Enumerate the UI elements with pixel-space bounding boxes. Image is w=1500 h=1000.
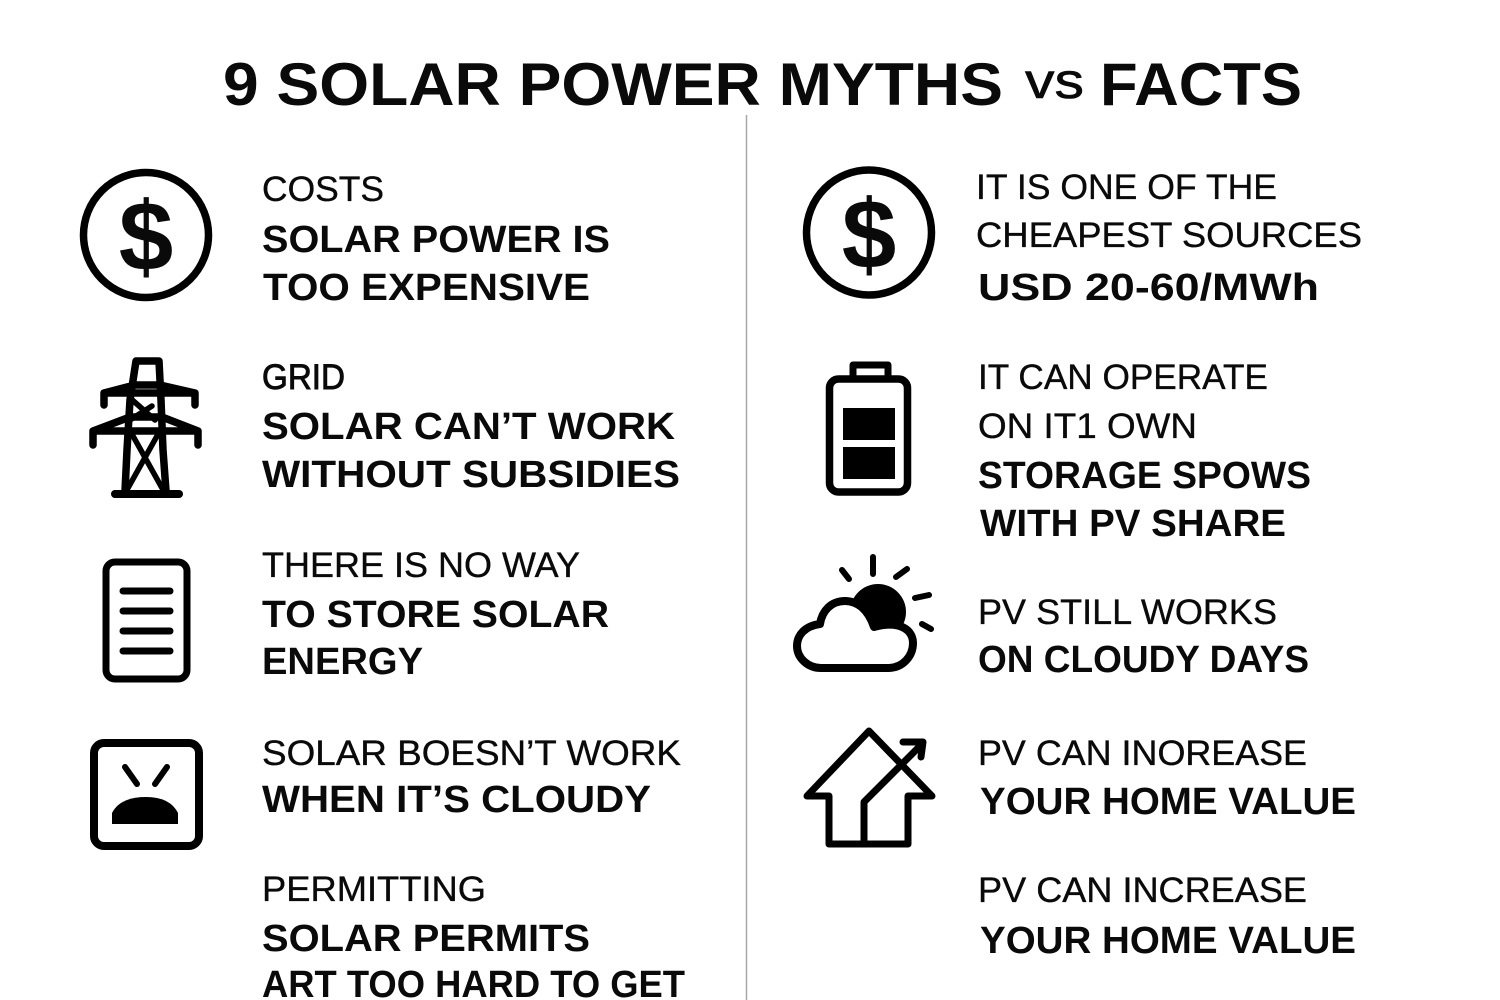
icon: battery [830,365,908,492]
icon: dollar coin: $ [842,179,896,289]
panel: myths column [84,170,685,1000]
fact 2: storage: IT CAN OPERATE [978,358,1268,397]
fact 4: home value [978,734,1356,823]
myth 3: storage: ENERGY [262,641,423,683]
title: vs [1025,53,1084,109]
fact 2: storage: ON IT1 OWN [978,407,1197,446]
fact 5: home value [978,871,1356,962]
myth 2: grid: GRID [262,358,345,397]
fact 5: home value: PV CAN INCREASE [978,871,1307,910]
title: FACTS [1100,51,1302,118]
myth 4: cloudy: SOLAR BOESN’T WORK [262,734,681,773]
myth 5: permitting [262,870,685,1000]
fact 1: cheapest: CHEAPEST SOURCES [976,216,1362,255]
icon: dollar coin [806,170,932,295]
icon: transmission tower [93,361,198,494]
myth 3: storage: THERE IS NO WAY [262,546,580,585]
myth 5: permitting: PERMITTING [262,870,486,909]
icon: dollar coin [84,172,208,298]
myth 3: storage [262,546,609,683]
panel: facts column [797,168,1362,962]
myth 1: costs [262,170,610,309]
fact 3: cloudy days: PV STILL WORKS [978,593,1277,632]
fact 1: cheapest [976,168,1362,309]
fact 5: home value: YOUR HOME VALUE [980,920,1356,962]
myth 4: cloudy: WHEN IT’S CLOUDY [262,779,651,821]
fact 2: storage: WITH PV SHARE [980,503,1286,545]
myth 1: costs: COSTS [262,170,384,209]
fact 3: cloudy days: ON CLOUDY DAYS [978,639,1309,681]
myth 2: grid: WITHOUT SUBSIDIES [262,454,680,496]
title [223,51,1302,118]
icon: dollar coin: $ [119,181,173,291]
fact 2: storage: STORAGE SPOWS [978,455,1311,497]
fact 1: cheapest: USD 20-60/MWh [978,267,1319,309]
myth 3: storage: TO STORE SOLAR [262,594,609,636]
fact 2: storage [978,358,1311,545]
myth 5: permitting: SOLAR PERMITS [262,918,590,960]
myth 2: grid [262,358,680,496]
myth 2: grid: SOLAR CAN’T WORK [262,406,676,448]
fact 4: home value: YOUR HOME VALUE [980,781,1356,823]
fact 3: cloudy days [978,593,1309,681]
myth 1: costs: TOO EXPENSIVE [263,267,590,309]
myth 4: cloudy [262,734,681,821]
icon: sad face box [94,743,199,846]
icon: house with rising arrow [807,731,932,844]
fact 1: cheapest: IT IS ONE OF THE [976,168,1277,207]
icon: sun behind cloud [797,557,931,668]
title: 9 SOLAR POWER MYTHS [223,51,1003,118]
fact 4: home value: PV CAN INOREASE [978,734,1307,773]
myth 1: costs: SOLAR POWER IS [262,219,610,261]
icon: document [106,562,187,679]
